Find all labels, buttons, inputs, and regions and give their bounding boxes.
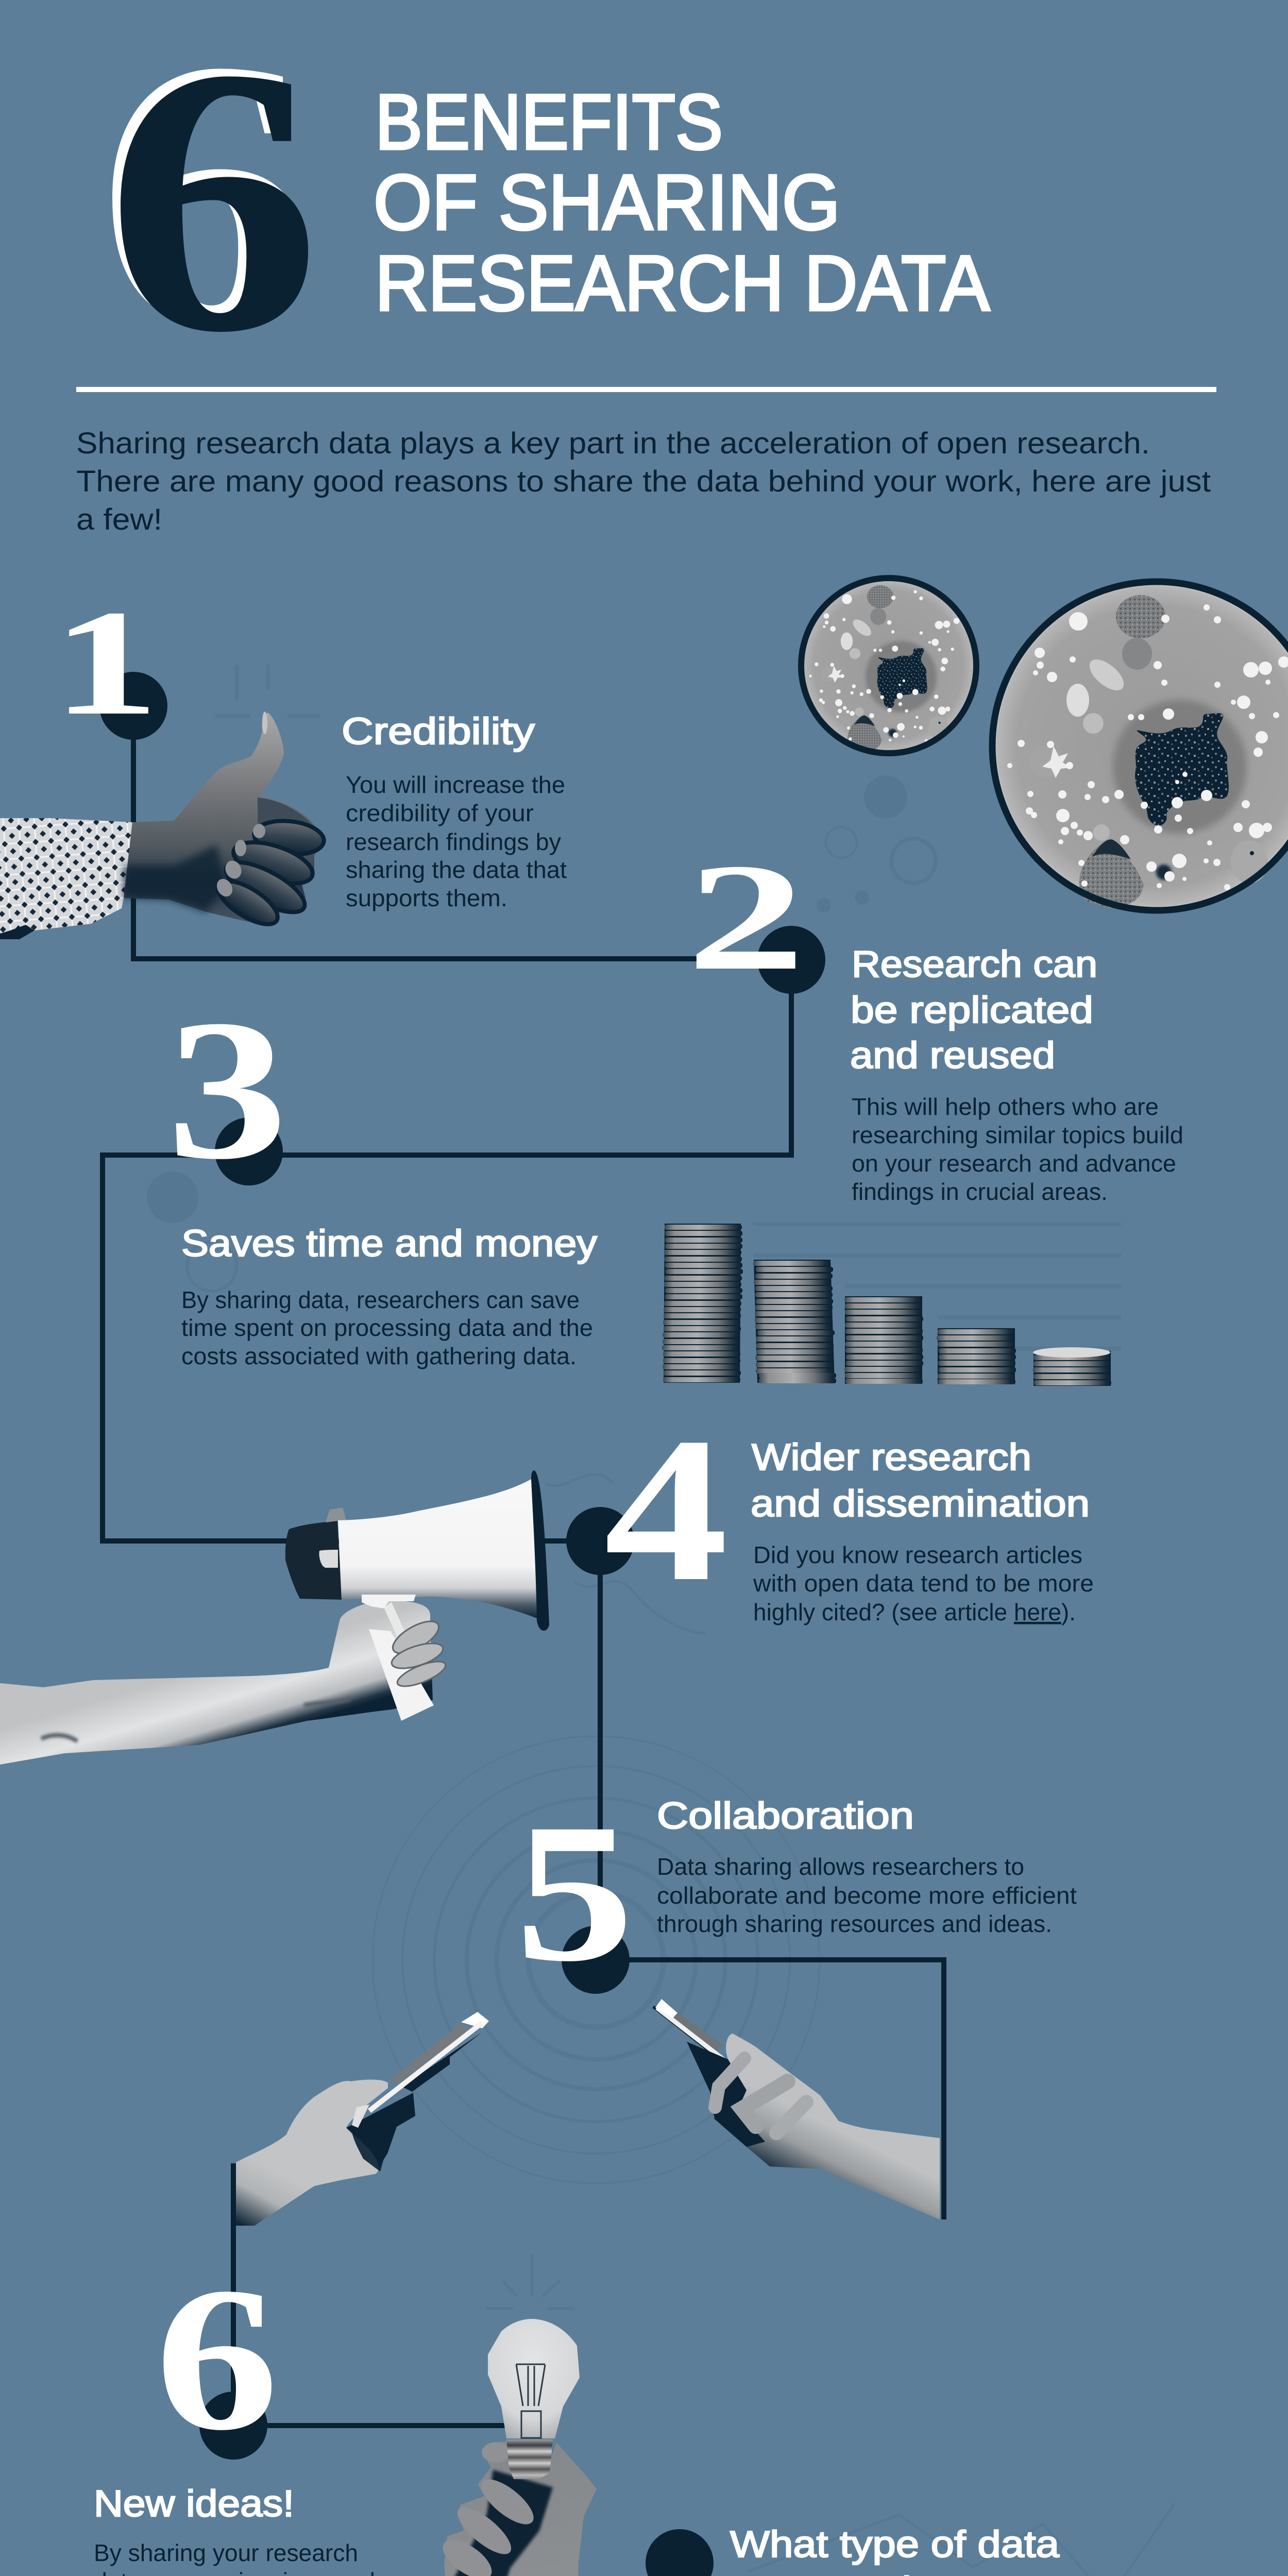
number 4: 4 <box>604 1395 728 1624</box>
heading: New ideas! <box>94 2483 294 2524</box>
body text: sharing the data that <box>346 856 567 883</box>
image: arm holding megaphone <box>0 1470 549 1765</box>
title: BENEFITS <box>375 78 723 166</box>
body text: time spent on processing data and the <box>181 1314 593 1341</box>
body text: collaborate and become more efficient <box>657 1882 1077 1909</box>
title: OF SHARING <box>374 159 840 246</box>
shirt sleeve <box>0 818 132 939</box>
intro text: a few! <box>76 503 162 536</box>
connector line from step 1 to step 5 <box>103 706 944 2219</box>
body text: credibility of your <box>346 800 534 826</box>
megaphone horn <box>338 1479 538 1619</box>
body text: You will increase the <box>346 771 565 798</box>
heading: Wider research <box>752 1437 1031 1478</box>
image: coin stacks <box>662 1224 1111 1386</box>
screw base <box>506 2439 553 2479</box>
heading <box>751 1437 1090 1524</box>
decorative filled spots <box>147 775 907 1223</box>
body text <box>657 1853 1077 1937</box>
body text: on your research and advance <box>852 1150 1176 1177</box>
intro text: There are many good reasons to share the data behind your work, here are just <box>76 465 1211 498</box>
body text: Data sharing allows researchers to <box>657 1853 1024 1880</box>
body text: By sharing your research <box>94 2539 358 2566</box>
image: right hand holding phone <box>653 1999 940 2219</box>
heading <box>730 2524 1060 2576</box>
heading: and dissemination <box>751 1483 1090 1524</box>
heading: What type of data <box>730 2524 1060 2565</box>
heading: Saves time and money <box>181 1223 597 1264</box>
section 3: saves time and money <box>167 978 597 1369</box>
light bulb glass <box>488 2319 580 2438</box>
body text: Did you know research articles <box>753 1541 1082 1568</box>
body text <box>181 1286 593 1369</box>
body text: highly cited? (see article here). <box>753 1599 1076 1625</box>
body text <box>346 771 567 911</box>
arm <box>0 1601 433 1765</box>
heading: Research can <box>852 944 1097 985</box>
image: left hand holding phone <box>236 2012 489 2226</box>
section 5: collaboration <box>515 1783 1077 2002</box>
body text: with open data tend to be more <box>753 1570 1094 1597</box>
section 6: new ideas <box>94 2244 388 2576</box>
hand <box>444 2441 617 2576</box>
coin stack 5 <box>1033 1347 1111 1386</box>
number 5: 5 <box>515 1783 634 2002</box>
title divider <box>76 387 1216 392</box>
heading: Collaboration <box>657 1795 914 1837</box>
node circles <box>99 672 825 2576</box>
heading: and reused <box>850 1035 1055 1076</box>
section: what type of data <box>728 2524 1140 2576</box>
section 2: replicated and reused <box>687 832 1183 1205</box>
heading <box>850 944 1097 1076</box>
connector line to data types <box>511 2563 680 2576</box>
body text: By sharing data, researchers can save <box>181 1286 580 1313</box>
fist shadow <box>450 2470 553 2576</box>
body text: through sharing resources and ideas. <box>657 1910 1052 1937</box>
filament <box>516 2364 545 2438</box>
image: hand holding light bulb <box>436 2319 617 2576</box>
coin stack 1 <box>662 1224 743 1383</box>
body text <box>852 1093 1183 1205</box>
image: large petri dish <box>992 582 1288 910</box>
connector line from step 5 hand to step 6 <box>233 2163 505 2426</box>
number 2: 2 <box>687 832 805 1002</box>
section 4: wider research <box>604 1395 1094 1625</box>
number 3: 3 <box>167 978 287 1201</box>
body text: researching similar topics build <box>852 1122 1183 1148</box>
body text: supports them. <box>346 885 507 911</box>
coin stack 3 <box>844 1296 923 1384</box>
body text: research findings by <box>346 828 561 855</box>
decorative background motifs <box>187 665 1175 2576</box>
body text <box>94 2539 388 2576</box>
body text: findings in crucial areas. <box>852 1178 1108 1205</box>
megaphone back <box>285 1521 342 1600</box>
fingers gripping handle <box>388 1615 448 1691</box>
intro text <box>76 427 1211 536</box>
number 1: 1 <box>52 579 159 747</box>
title: RESEARCH DATA <box>375 240 990 327</box>
title number 6 with white offset: 6 <box>106 0 320 411</box>
megaphone handle <box>362 1595 416 1608</box>
image: thumbs up hand <box>0 711 326 939</box>
coin stack 4 <box>937 1328 1016 1384</box>
intro text: Sharing research data plays a key part in the acceleration of open research. <box>76 427 1150 460</box>
body text <box>753 1541 1094 1625</box>
heading: Credibility <box>342 711 535 752</box>
body text: This will help others who are <box>852 1093 1159 1120</box>
number 6: 6 <box>155 2244 279 2473</box>
coin stack 2 <box>753 1260 836 1383</box>
section 1: credibility <box>52 579 567 911</box>
title <box>374 78 990 327</box>
image: small petri dish <box>801 578 976 753</box>
heading: be replicated <box>851 990 1093 1031</box>
body text: costs associated with gathering data. <box>181 1343 577 1369</box>
